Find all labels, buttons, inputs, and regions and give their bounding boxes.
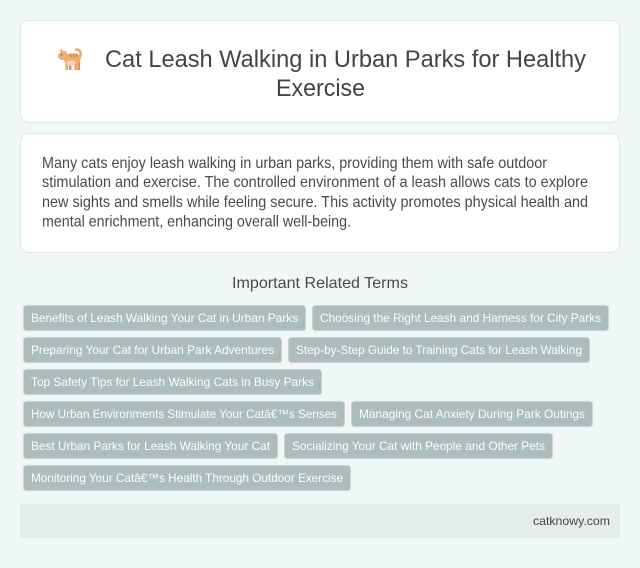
tag list xyxy=(24,306,608,490)
tag: senses: How Urban Environments Stimulate Your Catâ€™s Senses xyxy=(31,407,337,421)
icon: cat xyxy=(58,48,82,70)
tag: choosing: Choosing the Right Leash and Harness for City Parks xyxy=(320,311,601,325)
footer: catknowy.com xyxy=(533,514,610,528)
tag: best parks: Best Urban Parks for Leash Walking Your Cat xyxy=(31,439,271,453)
tag: anxiety: Managing Cat Anxiety During Park Outings xyxy=(359,407,585,421)
tag: monitoring xyxy=(24,466,350,490)
tag: benefits: Benefits of Leash Walking Your Cat in Urban Parks xyxy=(31,311,298,325)
text block: description xyxy=(42,155,588,230)
tag: monitoring: Monitoring Your Catâ€™s Health Through Outdoor Exercise xyxy=(31,471,343,485)
tag: safety xyxy=(24,370,322,394)
tag: preparing xyxy=(24,338,282,362)
text block: description: new sights and smells while feeling secure. This activity promotes physical health and xyxy=(42,194,588,211)
heading: related terms: Important Related Terms xyxy=(232,275,408,292)
text block: description: Many cats enjoy leash walking in urban parks, providing them with safe outdoor xyxy=(42,155,548,172)
tag: anxiety xyxy=(352,402,592,426)
text block: description: mental enrichment, enhancing overall well-being. xyxy=(42,214,351,230)
title xyxy=(105,46,586,102)
tag: senses xyxy=(24,402,344,426)
text block: description: stimulation and exercise. The controlled environment of a leash allows cats to explore xyxy=(42,174,588,191)
tag: socializing xyxy=(284,434,552,458)
tag: socializing: Socializing Your Cat with People and Other Pets xyxy=(292,439,545,453)
tag: preparing: Preparing Your Cat for Urban Park Adventures xyxy=(31,343,274,357)
tag: safety: Top Safety Tips for Leash Walking Cats in Busy Parks xyxy=(31,375,314,389)
tag: benefits xyxy=(24,306,306,330)
footer xyxy=(20,504,620,538)
tag: best parks xyxy=(24,434,278,458)
tag: step-by-step: Step-by-Step Guide to Training Cats for Leash Walking xyxy=(296,343,582,357)
title: Cat Leash Walking in Urban Parks for Healthy xyxy=(105,46,586,73)
title: Exercise xyxy=(276,75,365,102)
panel: description card xyxy=(20,134,620,252)
panel: title card xyxy=(20,20,620,122)
tag: step-by-step xyxy=(288,338,590,362)
tag: choosing xyxy=(312,306,608,330)
